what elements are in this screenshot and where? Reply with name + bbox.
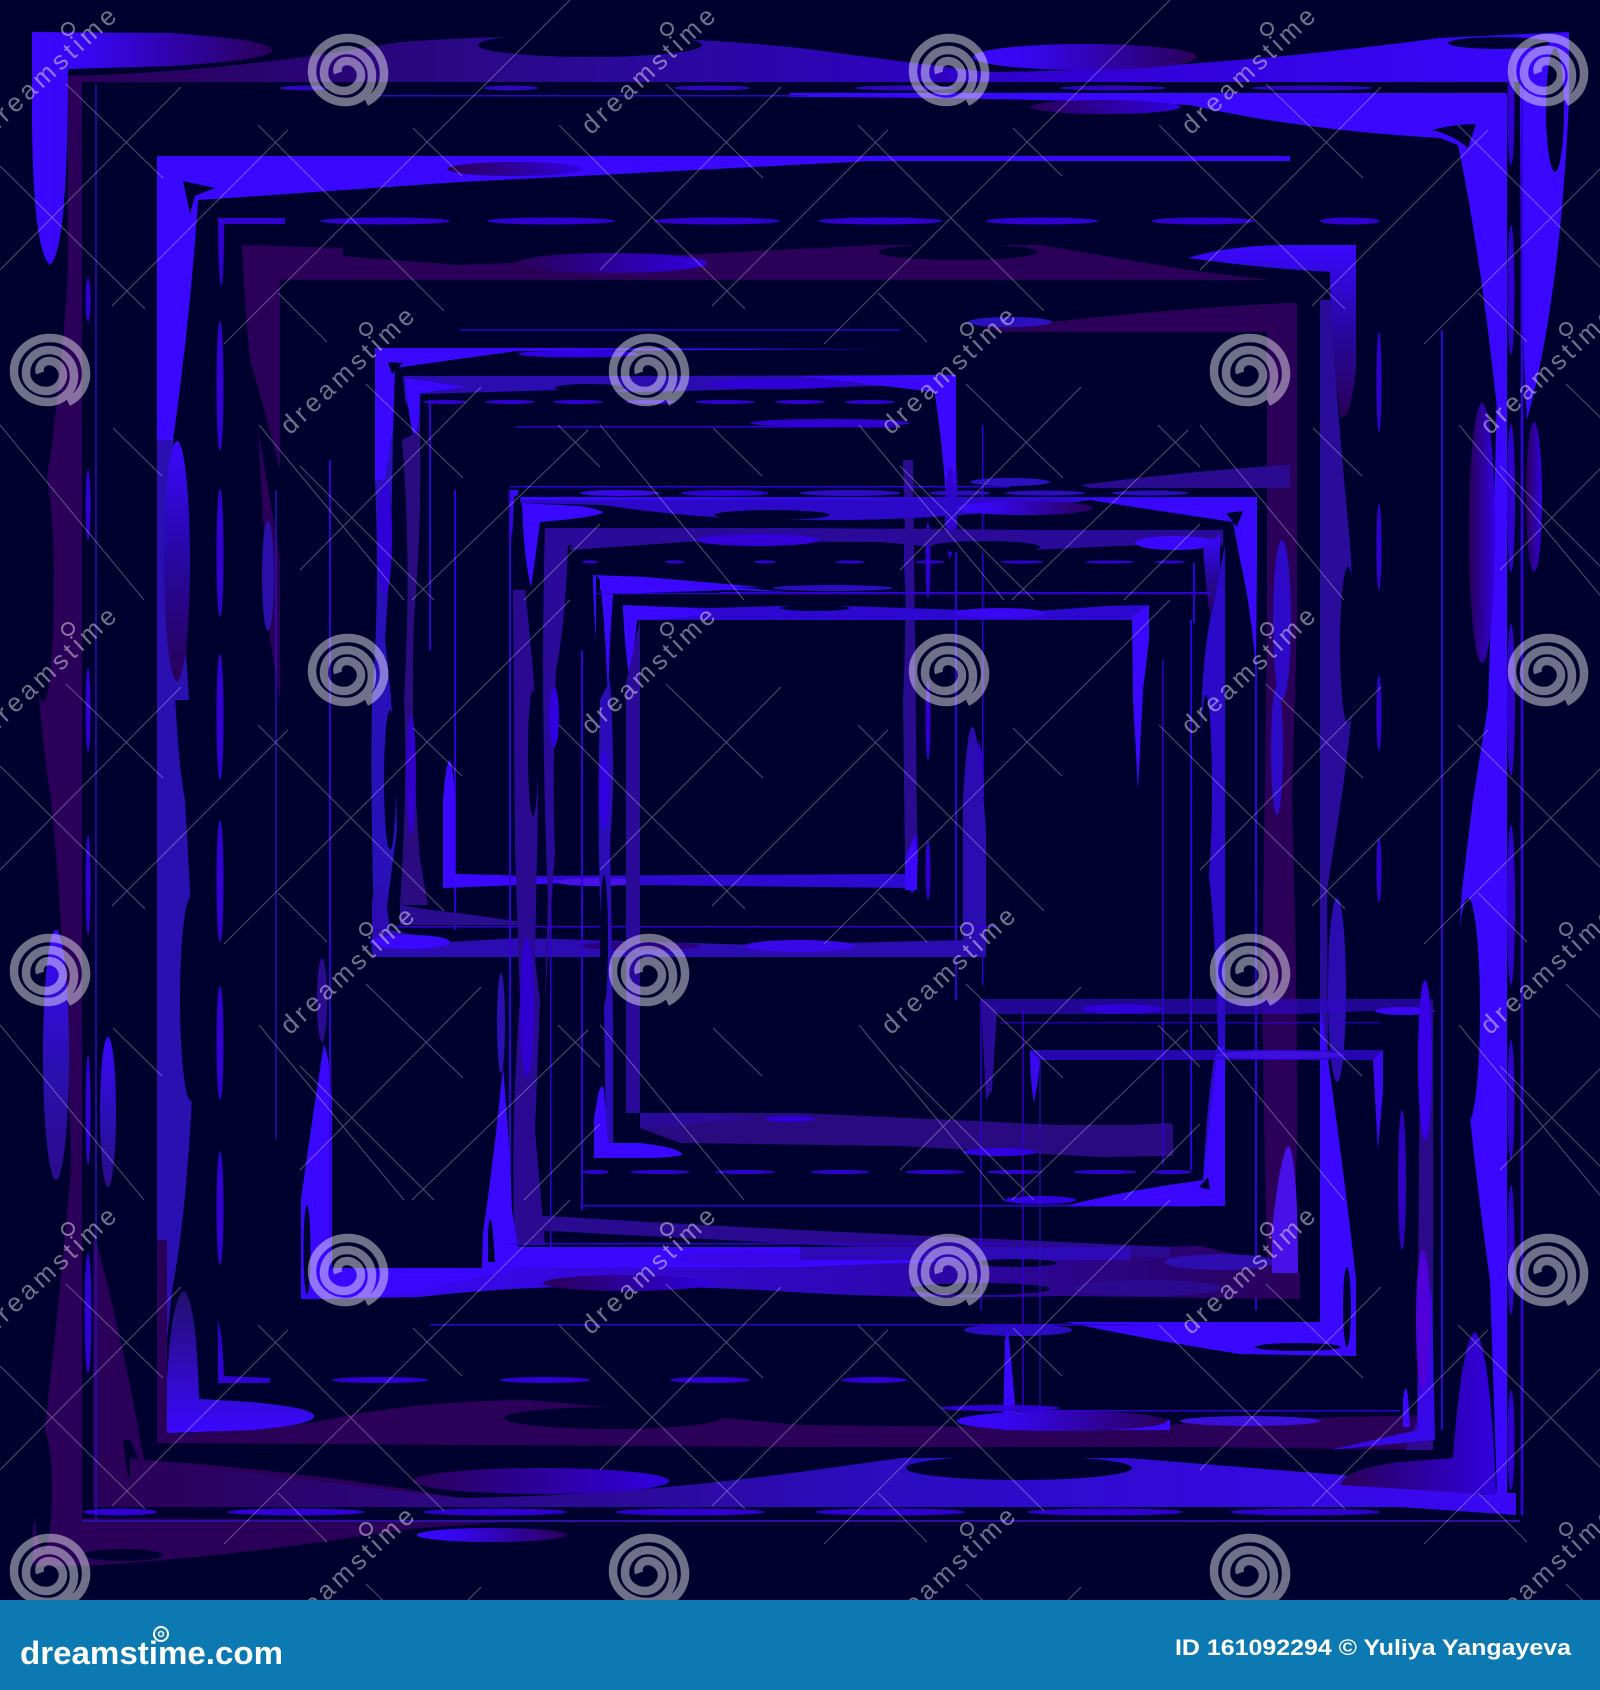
frame: central large top band xyxy=(509,465,1290,670)
side ellipses: left xyxy=(43,85,116,1520)
thin row above second frame xyxy=(280,86,1372,96)
watermark text: dreamstime xyxy=(1175,1201,1321,1340)
watermark text: dreamstime xyxy=(575,601,721,740)
watermark text: dreamstime xyxy=(274,901,420,1040)
dashes: upper-left nested frame xyxy=(423,400,984,1000)
frame: bottom-right lower band xyxy=(157,980,1435,1450)
frame: upper-left nested bottom xyxy=(370,460,995,957)
frame: upper-left nested left legs xyxy=(371,430,428,956)
frame: central bottom-left corner xyxy=(482,1067,1170,1268)
frame: blue third-frame top-right corner xyxy=(1188,245,1356,418)
watermark text: dreamstime xyxy=(575,1201,721,1340)
dashes and thin lines: central lower xyxy=(430,330,1443,1430)
watermark text: dreamstime xyxy=(274,301,420,440)
frame: second blue top-left corner and leg xyxy=(157,156,1290,1440)
frame: central right leg and bottom xyxy=(1004,545,1225,1206)
watermark text: dreamstime xyxy=(1175,1,1321,140)
watermark text: dreamstime xyxy=(575,1,721,140)
frame: outer top-left corner xyxy=(32,32,272,265)
frame: central second band xyxy=(545,528,1223,623)
watermark text: dreamstime xyxy=(1175,601,1321,740)
footer logo: dreamstime.com xyxy=(20,1635,283,1671)
watermark text: dreamstime xyxy=(875,301,1021,440)
footer credit: ID 161092294 © Yuliya Yangayeva xyxy=(1175,1635,1572,1660)
footer bar xyxy=(0,1600,1600,1690)
watermark text: dreamstime xyxy=(274,1501,420,1640)
frame: outer top band xyxy=(68,32,1569,82)
frame: bottom-right rectangle xyxy=(981,999,1435,1420)
frame: purple third frame xyxy=(242,244,1270,700)
lobe: second frame bottom-left xyxy=(167,1291,314,1433)
frame: upper-left nested top xyxy=(375,330,956,561)
dashes: central frame xyxy=(509,490,1210,1250)
frame: central inner nested frame xyxy=(593,575,1213,1158)
frame: third-frame right leg and bottom xyxy=(964,300,1356,1356)
frame: central left legs xyxy=(497,528,568,1245)
lobe: bottom-right corner xyxy=(1341,1332,1496,1495)
frame: outer right leg xyxy=(1520,48,1569,1515)
bottom blue ellipse xyxy=(417,1528,567,1542)
frame: purple top-right inner frame xyxy=(968,303,1297,1310)
frame: large bottom band xyxy=(82,1456,1520,1521)
frame: outer purple left and bottom arm xyxy=(32,76,800,1566)
dashed ellipses: second frame xyxy=(83,55,1515,1516)
watermark text: dreamstime xyxy=(875,1501,1021,1640)
frame: large right blue corner and leg xyxy=(790,93,1507,1495)
watermark text: dreamstime xyxy=(875,901,1021,1040)
frame: lower-left blue corner xyxy=(276,460,1300,1299)
